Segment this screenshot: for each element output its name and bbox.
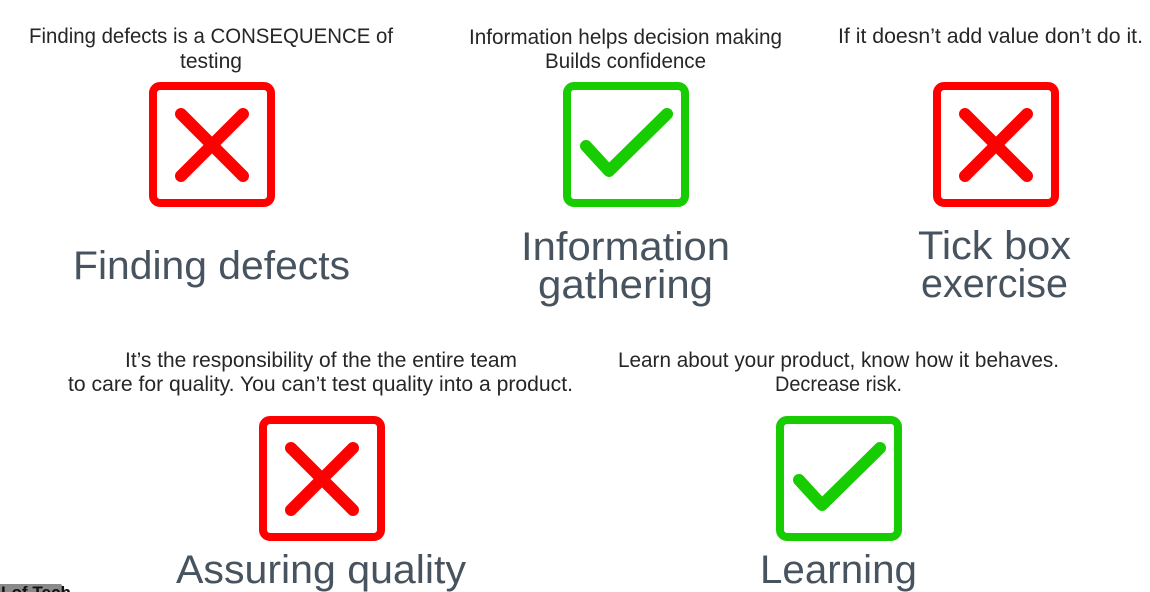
panel: assuring quality xyxy=(68,349,573,592)
heading: learning: Learning xyxy=(760,548,917,592)
description: learning: Learn about your product, know how it behaves. xyxy=(618,349,1059,372)
description: finding defects: Finding defects is a CONSEQUENCE of xyxy=(29,25,393,48)
description: information gathering: Information helps decision making xyxy=(469,26,782,49)
panel: finding defects xyxy=(29,25,393,288)
description: finding defects xyxy=(29,25,393,73)
icon: green tick in box xyxy=(567,86,685,203)
heading: assuring quality: Assuring quality xyxy=(176,548,466,592)
icon: green tick in box xyxy=(780,420,898,537)
panel: tick box exercise xyxy=(838,25,1143,306)
panel: information gathering xyxy=(469,26,782,307)
description: information gathering xyxy=(469,26,782,73)
description: finding defects: testing xyxy=(180,50,242,73)
description: tick box exercise: If it doesn’t add value don’t do it. xyxy=(838,25,1143,48)
heading: information gathering: Information xyxy=(521,225,730,269)
description: assuring quality xyxy=(68,349,573,396)
icon: red cross in box xyxy=(263,420,381,537)
description: assuring quality: to care for quality. You can’t test quality into a product. xyxy=(68,373,573,396)
heading: tick box exercise: exercise xyxy=(921,262,1068,306)
description: learning xyxy=(618,349,1059,396)
heading: tick box exercise xyxy=(918,224,1071,306)
description: learning: Decrease risk. xyxy=(775,373,902,396)
description: assuring quality: It’s the responsibility of the the entire team xyxy=(125,349,517,372)
heading: finding defects: Finding defects xyxy=(73,244,350,288)
icon: red cross in box xyxy=(153,86,271,203)
icon: red cross in box xyxy=(937,86,1055,203)
heading: tick box exercise: Tick box xyxy=(918,224,1071,268)
description: information gathering: Builds confidence xyxy=(545,50,706,73)
heading: information gathering xyxy=(521,225,730,307)
heading: information gathering: gathering xyxy=(538,263,713,307)
panel: learning xyxy=(618,349,1059,592)
